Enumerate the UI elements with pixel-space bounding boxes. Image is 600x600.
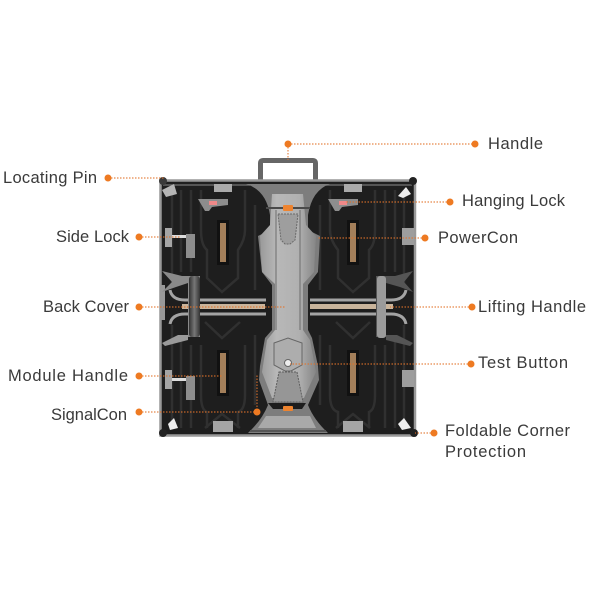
handle (260, 160, 316, 183)
label: Module Handle: Module Handle (8, 367, 128, 385)
label: SignalCon: SignalCon (51, 406, 127, 424)
back cover rails (170, 290, 406, 324)
lifting handles (162, 271, 413, 346)
orange clips (283, 205, 293, 411)
label: PowerCon: PowerCon (438, 229, 518, 247)
label: Side Lock: Side Lock (56, 228, 130, 246)
label: Foldable Corner Protection: Foldable Corner (445, 422, 570, 440)
label: Hanging Lock: Hanging Lock (462, 192, 566, 210)
center spine (246, 184, 330, 433)
slots (220, 223, 356, 393)
label: Foldable Corner Protection: Protection (445, 443, 526, 461)
locks (165, 184, 414, 432)
cabinet body (160, 180, 415, 436)
leader lines (108, 144, 475, 433)
label: Handle: Handle (488, 135, 543, 153)
label: Locating Pin: Locating Pin (3, 169, 97, 187)
test button (284, 360, 292, 366)
leader dots (104, 140, 478, 436)
label: Back Cover: Back Cover (43, 298, 130, 316)
panel: LED cabinet rear view (159, 160, 418, 437)
label: Lifting Handle: Lifting Handle (478, 298, 586, 316)
label: Test Button: Test Button (478, 354, 568, 372)
foldable corners (159, 177, 418, 437)
